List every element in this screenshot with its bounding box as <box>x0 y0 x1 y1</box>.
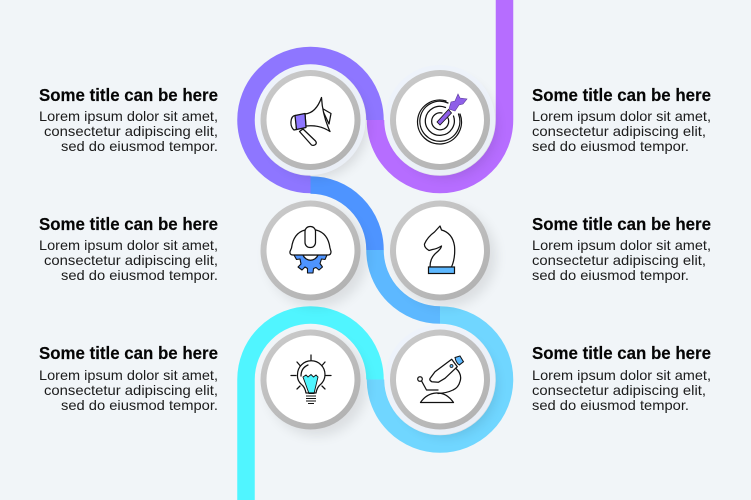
body text: Lorem ipsum dolor sit amet, <box>39 367 218 383</box>
heading: Some title can be here <box>532 214 711 234</box>
icon: microscope <box>418 356 464 402</box>
node 4: chess knight <box>390 200 496 307</box>
ribbon segment: purple <box>376 0 504 184</box>
node 2: target <box>385 65 496 177</box>
body text: sed do eiusmod tempor. <box>532 267 689 283</box>
icon: hard hat with gear <box>290 226 331 273</box>
heading: Some title can be here <box>532 85 711 105</box>
ribbon segment: sky blue <box>376 315 504 444</box>
body text: consectetur adipiscing elit, <box>532 123 706 139</box>
icon: target with dart <box>418 94 467 144</box>
body text <box>532 108 711 154</box>
body text <box>39 367 218 413</box>
body text: Lorem ipsum dolor sit amet, <box>532 237 711 253</box>
node 1: megaphone <box>256 65 367 177</box>
body text: sed do eiusmod tempor. <box>61 267 218 283</box>
body text <box>39 108 218 154</box>
body text: Lorem ipsum dolor sit amet, <box>39 108 218 124</box>
body text: sed do eiusmod tempor. <box>61 138 218 154</box>
ribbon segment: light blue <box>375 250 440 315</box>
node 6: microscope <box>385 324 496 436</box>
heading: Some title can be here <box>532 343 711 363</box>
body text: sed do eiusmod tempor. <box>61 397 218 413</box>
ribbon segment: cyan <box>246 315 375 500</box>
body text: consectetur adipiscing elit, <box>44 252 218 268</box>
body text: sed do eiusmod tempor. <box>532 138 689 154</box>
body text: consectetur adipiscing elit, <box>44 123 218 139</box>
body text <box>39 237 218 283</box>
ribbon segment: blue <box>310 185 375 250</box>
heading: Some title can be here <box>39 85 218 105</box>
text block: top right <box>532 85 711 154</box>
node 5: light bulb <box>260 330 367 436</box>
body text: consectetur adipiscing elit, <box>532 252 706 268</box>
body text <box>532 237 711 283</box>
heading: Some title can be here <box>39 214 218 234</box>
text block: middle right <box>532 214 711 283</box>
heading: Some title can be here <box>39 343 218 363</box>
text block: bottom left <box>39 343 218 413</box>
icon: light bulb <box>291 355 331 404</box>
body text: Lorem ipsum dolor sit amet, <box>39 237 218 253</box>
body text: Lorem ipsum dolor sit amet, <box>532 367 711 383</box>
text block: middle left <box>39 214 218 283</box>
body text: consectetur adipiscing elit, <box>44 382 218 398</box>
body text: consectetur adipiscing elit, <box>532 382 706 398</box>
winding ribbon path <box>246 0 504 500</box>
node 3: hard hat with gear <box>260 200 367 307</box>
body text: sed do eiusmod tempor. <box>532 397 689 413</box>
body text <box>532 367 711 413</box>
text block: bottom right <box>532 343 711 413</box>
ribbon segment: violet <box>246 55 375 184</box>
icon: megaphone <box>291 98 331 145</box>
body text: Lorem ipsum dolor sit amet, <box>532 108 711 124</box>
icon: chess knight <box>424 226 455 274</box>
text block: top left <box>39 85 218 154</box>
